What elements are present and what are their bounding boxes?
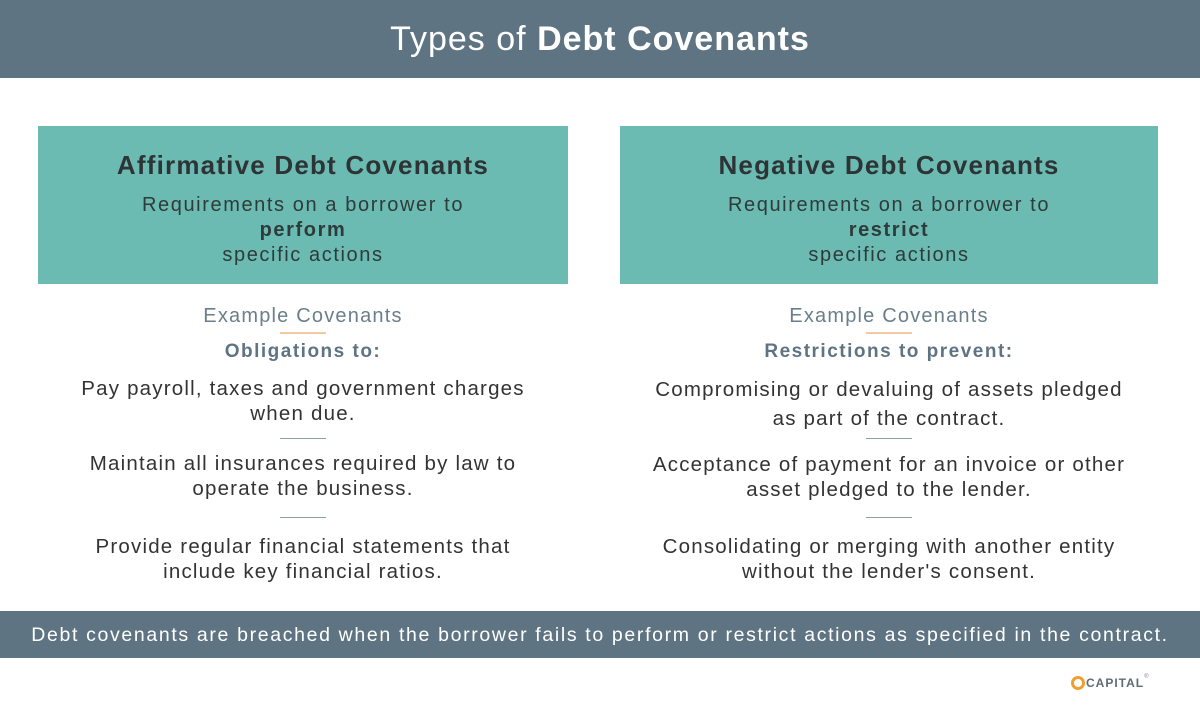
item 3: Consolidating or merging with another entity	[663, 535, 1115, 558]
description: affirmative: specific actions	[222, 244, 384, 266]
description: negative: restrict	[849, 219, 929, 241]
panel: negative	[620, 126, 1158, 284]
item 3: Provide regular financial statements that	[96, 535, 510, 558]
logo: ecapital: CAPITAL®	[1086, 674, 1149, 690]
description: negative: specific actions	[808, 244, 970, 266]
icon: e circle	[1071, 676, 1085, 690]
item 1	[655, 378, 1123, 430]
label: example covenants: Example Covenants	[203, 305, 403, 327]
item 1: as part of the contract.	[773, 407, 1005, 430]
description: negative: Requirements on a borrower to	[728, 194, 1050, 216]
item 2: operate the business.	[192, 477, 414, 500]
description: affirmative: Requirements on a borrower to	[142, 194, 464, 216]
list: negative examples	[653, 305, 1125, 583]
footer bar	[0, 611, 1200, 658]
title: Types of Debt Covenants	[390, 20, 810, 58]
header bar	[0, 0, 1200, 78]
list: affirmative examples	[81, 305, 525, 583]
item 1: when due.	[250, 402, 356, 425]
item 3	[96, 535, 510, 583]
item 1	[81, 377, 525, 425]
item 3: include key financial ratios.	[163, 560, 443, 583]
item 2: Maintain all insurances required by law to	[90, 452, 516, 475]
subheading: restrictions: Restrictions to prevent:	[764, 341, 1014, 362]
item 3: without the lender's consent.	[742, 560, 1036, 583]
footer note: Debt covenants are breached when the borrower fails to perform or restrict actions as specified in the contract.	[31, 624, 1169, 646]
heading: negative: Negative Debt Covenants	[718, 150, 1060, 180]
description: affirmative	[142, 194, 464, 266]
description: negative	[728, 194, 1050, 266]
subheading: obligations: Obligations to:	[225, 341, 381, 362]
panel: affirmative	[38, 126, 568, 284]
item 2: asset pledged to the lender.	[746, 478, 1032, 501]
description: affirmative: perform	[260, 219, 346, 241]
item 1: Compromising or devaluing of assets pledged	[655, 378, 1123, 401]
item 2	[90, 452, 516, 500]
item 2: Acceptance of payment for an invoice or other	[653, 453, 1125, 476]
label: example covenants: Example Covenants	[789, 305, 989, 327]
item 2	[653, 453, 1125, 501]
item 3	[663, 535, 1115, 583]
item 1: Pay payroll, taxes and government charges	[81, 377, 525, 400]
heading: affirmative: Affirmative Debt Covenants	[117, 150, 489, 180]
